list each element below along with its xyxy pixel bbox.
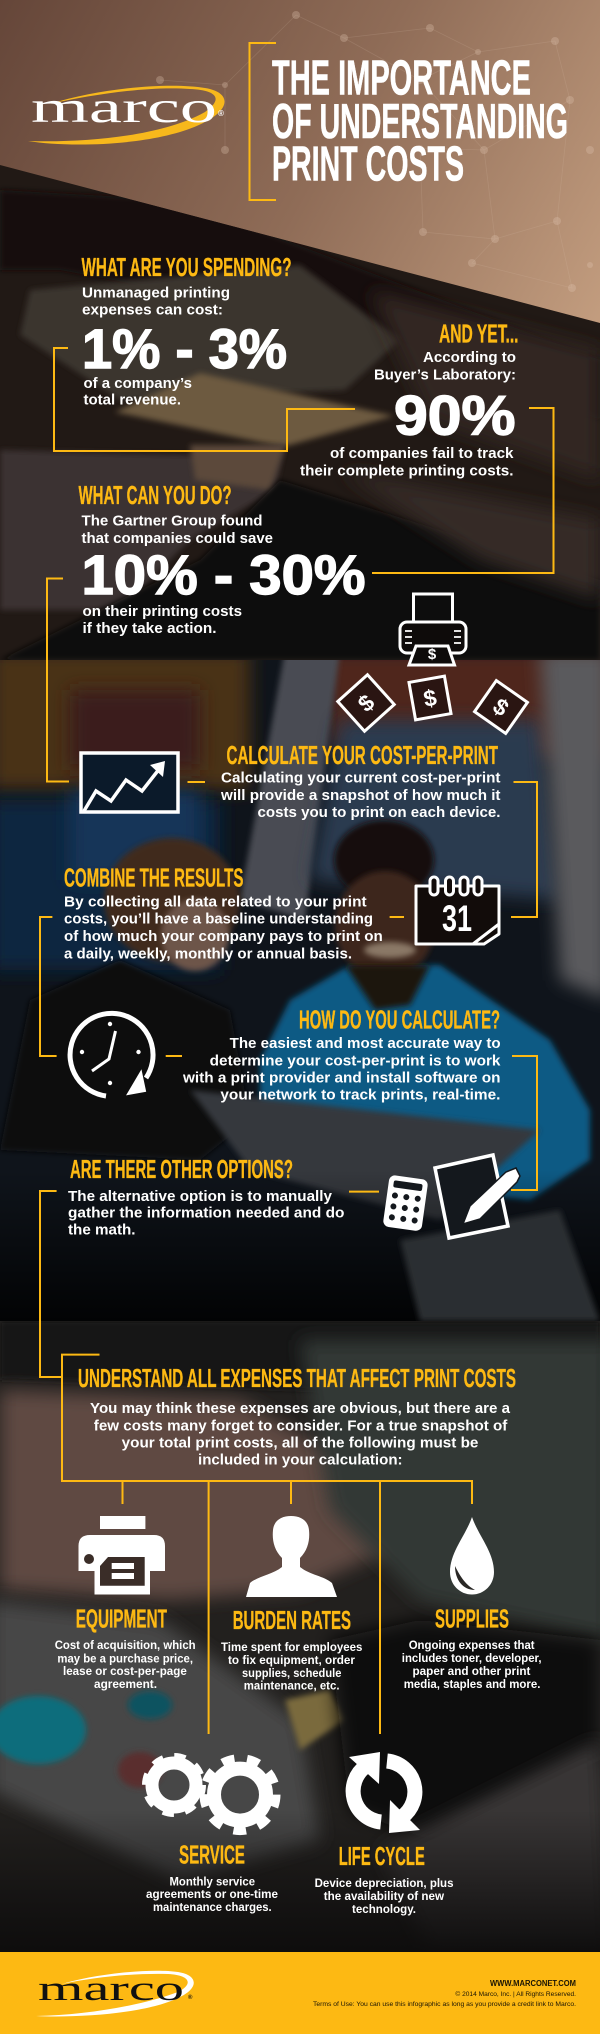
text block: Calculating your current cost-per-print xyxy=(221,771,501,787)
icon: calculator xyxy=(383,1175,428,1232)
logo: Marco footer: marco xyxy=(38,1969,184,2008)
text block: on their printing costs xyxy=(82,604,242,620)
text block: their complete printing costs. xyxy=(300,464,514,480)
icon: gears xyxy=(146,1757,276,1831)
heading: AND YET... xyxy=(439,318,518,348)
credits: © 2014 Marco, Inc. | All Rights Reserved. xyxy=(455,1990,576,1998)
text block: if they take action. xyxy=(82,621,216,637)
text block xyxy=(221,1640,363,1693)
connector xyxy=(511,782,537,917)
heading: WHAT CAN YOU DO? xyxy=(78,480,232,510)
text block xyxy=(315,1876,454,1916)
heading: ARE THERE OTHER OPTIONS? xyxy=(70,1154,293,1184)
text block: few costs many forget to consider. For a true snapshot of xyxy=(94,1418,507,1434)
stat: 1% - 3%: 1% - 3% xyxy=(82,317,287,380)
expense tree lines xyxy=(62,1355,472,1734)
text block: lease or cost-per-page xyxy=(63,1664,187,1678)
text block: total revenue. xyxy=(84,393,181,409)
title bracket xyxy=(250,43,276,200)
text block xyxy=(82,514,273,547)
text block: of companies fail to track xyxy=(330,446,514,462)
text block: the math. xyxy=(68,1223,136,1239)
panel: burden rates xyxy=(221,1516,363,1693)
text block: of a company’s xyxy=(84,376,192,392)
text block xyxy=(374,350,516,384)
panel: what are you spending xyxy=(82,252,292,409)
text block: your network to track prints, real-time. xyxy=(220,1087,500,1103)
text block: According to xyxy=(423,350,516,366)
footer band xyxy=(0,1952,600,2034)
panel: supplies xyxy=(402,1517,542,1691)
text block: gather the information needed and do xyxy=(68,1206,345,1222)
text block: may be a purchase price, xyxy=(57,1651,193,1665)
heading: EQUIPMENT xyxy=(76,1604,167,1634)
text block: Unmanaged printing xyxy=(82,286,230,302)
stat: 10% - 30%: 10% - 30% xyxy=(82,543,366,606)
icon: person xyxy=(246,1516,337,1597)
icon: dollar bills: $ xyxy=(353,689,380,717)
icon: dollar bills: $ xyxy=(488,693,514,721)
panel: equipment xyxy=(55,1516,196,1691)
text block: costs, you’ll have a baseline understanding xyxy=(64,912,373,928)
text block: Buyer’s Laboratory: xyxy=(374,368,516,384)
text block xyxy=(68,1189,345,1239)
text block: costs you to print on each device. xyxy=(258,805,500,821)
text block xyxy=(55,1638,196,1691)
heading: SUPPLIES xyxy=(435,1604,509,1634)
text block: maintenance, etc. xyxy=(244,1679,340,1693)
panel: life cycle xyxy=(315,1752,454,1916)
connector xyxy=(372,408,554,573)
icon: calendar: 31 xyxy=(442,898,472,939)
icon: ink drop xyxy=(450,1517,494,1594)
connector xyxy=(54,348,355,451)
heading: COMBINE THE RESULTS xyxy=(64,862,244,892)
text block: agreement. xyxy=(94,1677,157,1691)
title xyxy=(272,52,568,192)
icon: dollar bills xyxy=(338,675,527,733)
icon: paper and pencil xyxy=(435,1155,520,1238)
heading: WHAT ARE YOU SPENDING? xyxy=(82,252,292,282)
text block xyxy=(182,1036,501,1103)
background: printer photo xyxy=(0,160,600,660)
text block: paper and other print xyxy=(412,1664,530,1678)
text block: maintenance charges. xyxy=(153,1900,272,1914)
text block: that companies could save xyxy=(82,531,273,547)
logo: Marco header: ® xyxy=(218,109,224,118)
text block: The easiest and most accurate way to xyxy=(230,1036,501,1052)
connector xyxy=(40,1191,62,1377)
icon: printer with dollar: $ xyxy=(428,646,437,663)
panel: how do you calculate xyxy=(182,1005,501,1103)
icon: printer with dollar xyxy=(400,594,466,665)
text block: of how much your company pays to print on xyxy=(64,929,383,945)
connector dash xyxy=(390,916,404,918)
connector dash xyxy=(349,1191,379,1193)
panel: and yet xyxy=(300,318,518,480)
text block xyxy=(146,1874,278,1914)
connector xyxy=(40,917,57,1056)
connector xyxy=(47,578,69,782)
credits: Terms of Use: You can use this infographic as long as you provide a credit link to Marco. xyxy=(313,2001,576,2008)
text block xyxy=(300,446,514,480)
heading: BURDEN RATES xyxy=(233,1605,351,1635)
connector dash xyxy=(188,781,205,783)
panel: combine the results xyxy=(64,862,383,962)
background: tan header with network pattern xyxy=(0,0,600,660)
panel: service xyxy=(146,1757,278,1914)
panel: what can you do xyxy=(78,480,366,637)
text block: agreements or one-time xyxy=(146,1887,278,1901)
logo: Marco footer xyxy=(36,1969,194,2016)
icon: calendar xyxy=(416,877,499,944)
text block: with a print provider and install software on xyxy=(182,1070,500,1086)
text block: technology. xyxy=(352,1902,416,1916)
text block: The alternative option is to manually xyxy=(68,1189,332,1205)
text block xyxy=(84,376,192,409)
text block xyxy=(90,1401,511,1468)
text block: Cost of acquisition, which xyxy=(55,1638,196,1652)
text block: supplies, schedule xyxy=(242,1666,342,1680)
icon: cycle arrows xyxy=(349,1752,420,1833)
text block: media, staples and more. xyxy=(404,1677,540,1691)
text block: You may think these expenses are obvious, but there are a xyxy=(90,1401,511,1417)
text block: By collecting all data related to your print xyxy=(64,894,367,910)
text block: included in your calculation: xyxy=(198,1452,403,1468)
background: people photo xyxy=(0,650,600,1321)
text block: Device depreciation, plus xyxy=(315,1876,454,1890)
logo: Marco footer: ® xyxy=(188,1994,193,2001)
text block: Time spent for employees xyxy=(221,1640,363,1654)
text block: will provide a snapshot of how much it xyxy=(220,788,501,804)
text block: to fix equipment, order xyxy=(228,1653,355,1667)
text block: a daily, weekly, monthly or annual basis. xyxy=(64,946,352,962)
text block xyxy=(220,771,501,821)
text block: includes toner, developer, xyxy=(402,1651,542,1665)
text block: your total print costs, all of the following must be xyxy=(122,1436,478,1452)
text block: The Gartner Group found xyxy=(82,514,262,530)
panel: are there other options xyxy=(68,1154,345,1239)
text block: Monthly service xyxy=(170,1874,255,1888)
credits: WWW.MARCONET.COM xyxy=(490,1979,576,1988)
logo: Marco header: marco xyxy=(31,83,217,132)
logo: Marco header xyxy=(28,83,225,145)
panel: understand all expenses xyxy=(78,1363,516,1468)
text block: the availability of new xyxy=(324,1889,445,1903)
icon: dollar bills: $ xyxy=(421,684,439,712)
credits xyxy=(313,1979,576,2008)
connector xyxy=(511,1056,537,1190)
text block xyxy=(82,286,230,318)
heading: LIFE CYCLE xyxy=(339,1841,425,1871)
text block xyxy=(402,1638,542,1691)
icon: printer xyxy=(78,1516,165,1594)
connector dash xyxy=(166,1055,182,1057)
title: PRINT COSTS xyxy=(272,138,464,192)
icon: clock xyxy=(70,1013,153,1096)
panel: calculate your cost-per-print xyxy=(220,740,501,821)
text block: determine your cost-per-print is to work xyxy=(210,1054,501,1070)
stat: 90%: 90% xyxy=(394,384,516,446)
background: copier keypad photo xyxy=(0,1321,600,1952)
icon: rising chart xyxy=(81,753,178,812)
text block xyxy=(64,894,383,962)
text block: Ongoing expenses that xyxy=(409,1638,535,1652)
text block xyxy=(82,604,242,637)
text block: expenses can cost: xyxy=(82,302,223,318)
heading: SERVICE xyxy=(179,1840,245,1870)
